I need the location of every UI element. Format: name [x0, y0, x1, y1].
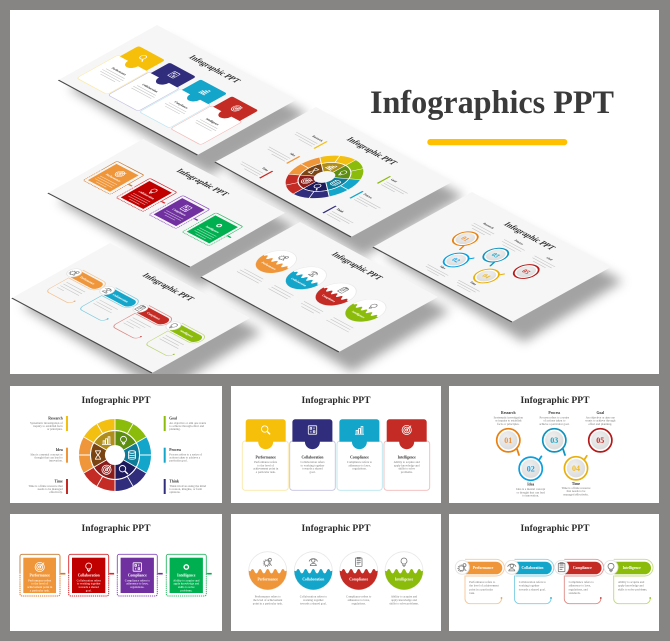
isometric slide: rings: Idea	[439, 265, 447, 270]
pill labels and text: Compliance refers to	[569, 580, 594, 584]
isometric slide: puzzle cards: Infographic PPT	[186, 54, 243, 85]
isometric slide: wheel: Research	[311, 135, 324, 142]
pill labels and text: Performance	[473, 566, 494, 570]
left column text: innovation.	[49, 459, 63, 463]
ring text: Time is a finite resource	[561, 486, 591, 490]
ring markers	[497, 429, 612, 480]
ring text: wants to achieve through	[585, 419, 616, 423]
hero accent bar	[427, 139, 567, 145]
circle labels and text: Collaboration	[302, 578, 324, 582]
isometric slide: wave circles	[200, 222, 450, 372]
left column text: Idea	[56, 448, 63, 452]
isometric slide: wheel: Think	[335, 208, 345, 213]
right column text: planning.	[169, 427, 181, 431]
frame text: problems.	[180, 588, 193, 592]
isometric slide: rings: Process	[513, 239, 525, 246]
panel: wave circles slide	[231, 514, 441, 631]
heading: Infographic PPT	[82, 396, 151, 406]
circle labels and text: towards a shared goal.	[300, 602, 327, 606]
isometric slide: wave circles: Performance	[260, 261, 278, 271]
ring numbers: 02	[527, 464, 535, 473]
isometric slide: wheel: Process	[362, 193, 374, 199]
isometric slide: dashed frames: Collaboration	[137, 190, 156, 200]
card text: goal.	[310, 470, 316, 474]
ring text: Systematic investigation	[494, 416, 524, 420]
heading: Infographic PPT	[302, 396, 371, 406]
right column text: opinions.	[169, 490, 181, 494]
isometric slide: rings: 03	[489, 252, 501, 259]
frame text: Performance refers	[28, 578, 52, 582]
right column text: particular goal.	[169, 459, 188, 463]
isometric slide: rings: Time	[469, 281, 478, 286]
isometric slide: wheel: Idea	[289, 152, 297, 157]
circle labels and text: Collaboration refers to	[300, 594, 327, 598]
segmented wheel diagram with bars	[66, 416, 166, 494]
card text	[253, 456, 420, 474]
four tabbed cards	[242, 419, 430, 490]
frame text: Performance	[29, 574, 50, 578]
left column text: Idea is a mental concept or	[30, 453, 63, 457]
isometric slide: rings: 01	[458, 236, 471, 243]
right column text: Think involves using the mind	[169, 484, 206, 488]
ring text: of actions taken to	[543, 419, 566, 423]
isometric slide: dashed frames: Intelligence	[204, 225, 221, 234]
frame text: to working together	[77, 582, 101, 586]
isometric slide: rings: 02	[449, 257, 462, 264]
left column text	[28, 416, 64, 494]
circle labels and text: working together	[303, 598, 324, 602]
ring text: facts or principles.	[497, 422, 520, 426]
isometric slide: dashed frames: Compliance	[171, 208, 188, 217]
pill labels and text: Ability to acquire and	[618, 580, 645, 584]
ring text: Idea	[527, 482, 534, 486]
isometric slide: wave circles: Intelligence	[350, 310, 367, 319]
ring text: Goal	[597, 411, 604, 415]
pill labels and text: Performance refers to	[469, 580, 496, 584]
left column text: or principles.	[47, 427, 63, 431]
frame text: Compliance	[128, 574, 147, 578]
circle labels and text	[253, 578, 419, 606]
ring text: managed effectively.	[564, 492, 589, 496]
isometric slide: rings: 05	[519, 269, 532, 276]
ring text: Process refers to a series	[540, 416, 570, 420]
card text: apply knowledge and	[394, 463, 420, 467]
circle labels and text: skills to solve problems.	[389, 602, 419, 606]
pill labels and text: regulations, and	[569, 587, 588, 592]
frame text: regulations.	[130, 585, 145, 589]
ring numbers: 04	[572, 464, 580, 473]
isometric slide: puzzle cards: Intelligence	[204, 117, 221, 126]
right column text: Goal	[169, 416, 177, 420]
frame text: a particular task.	[30, 588, 50, 592]
ring text: or thought that can lead	[517, 490, 545, 494]
card text: to the level of	[257, 463, 274, 467]
frame text: Compliance refers to	[125, 578, 150, 582]
left column text: inquiry to establish facts	[33, 424, 64, 428]
isometric slide: wheel	[214, 107, 464, 257]
card text: skills to solve	[398, 467, 416, 471]
ring text: achieve a particular goal.	[539, 422, 570, 426]
pill labels and text: working together	[519, 584, 539, 588]
pill labels and text: apply knowledge and	[618, 584, 644, 588]
isometric slide: rings: Research	[482, 222, 495, 230]
ring numbers: 01	[504, 436, 512, 445]
right column text: to reason, imagine, or form	[169, 487, 203, 492]
pill labels and text: task.	[469, 591, 475, 595]
pill labels and text: Collaboration refers to	[519, 580, 546, 584]
frame text: to the level of	[31, 582, 48, 586]
pill labels and text: Compliance	[573, 566, 592, 570]
isometric slide: pills: Infographic PPT	[140, 272, 197, 303]
frame text: Intelligence	[177, 574, 196, 578]
isometric slide: pills: Performance	[79, 276, 97, 286]
isometric slide: dashed frames: Infographic PPT	[174, 167, 232, 198]
frame text: adherence to laws,	[126, 582, 149, 587]
card text: Intelligence	[398, 456, 416, 460]
panel: dashed frames slide	[10, 514, 222, 631]
frame text: skills to solve	[178, 585, 195, 589]
card text: adherence to laws,	[348, 463, 371, 468]
panel: hero with isometric slides	[10, 10, 659, 393]
circle labels and text: Intelligence	[395, 578, 413, 582]
four colored frames	[20, 554, 212, 596]
left column text: needs to be managed	[38, 487, 63, 491]
right column text	[169, 416, 207, 494]
frame text: Collaboration refers	[77, 578, 102, 582]
isometric slide: rings: Goal	[545, 256, 554, 261]
isometric slide: pills: Intelligence	[179, 329, 195, 338]
circle labels and text: Compliance refers to	[346, 594, 372, 598]
ring text: Idea is a mental concept	[516, 487, 545, 491]
card text: achievement point in	[253, 467, 279, 471]
ring text: that needs to be	[567, 489, 586, 493]
circle labels and text: Performance	[257, 578, 278, 582]
circle labels and text: regulations.	[352, 602, 366, 606]
heading: Infographic PPT	[520, 524, 590, 534]
frame text: Collaboration	[78, 574, 100, 578]
pill labels and text: standards.	[569, 591, 581, 595]
ring text: Time	[572, 482, 580, 486]
left column text: Time is a finite resource that	[28, 484, 63, 488]
panel: puzzle cards slide	[231, 386, 441, 503]
pill labels and text: Intelligence	[623, 566, 641, 570]
left column text: Systematic investigation of	[30, 421, 63, 425]
circle labels and text: Compliance	[349, 578, 368, 582]
isometric slide: pills: Compliance	[145, 312, 162, 321]
ring text: or inquiry to establish	[495, 419, 522, 423]
isometric slide: puzzle cards: Collaboration	[141, 83, 159, 93]
circle labels and text: Performance refers to	[255, 594, 281, 598]
card text: Collaboration	[302, 456, 323, 460]
card text: Compliance	[350, 456, 369, 460]
card text: Performance	[255, 456, 276, 460]
pill labels and text: adherence to laws,	[569, 584, 591, 589]
pill labels and text: skills to solve problems.	[618, 587, 647, 591]
isometric slide: puzzle cards: Performance	[110, 67, 128, 76]
isometric slide: puzzle cards: Compliance	[173, 100, 190, 110]
ring text: effort and planning.	[588, 422, 612, 426]
isometric slide: rings	[372, 192, 623, 342]
four wave circles	[249, 552, 423, 590]
isometric slide stack	[11, 25, 623, 393]
ring text: Research	[501, 411, 516, 415]
heading: Infographic PPT	[82, 524, 151, 534]
panel: wheel slide	[10, 386, 222, 503]
pill labels and text: point in a particular	[469, 587, 493, 591]
frame text: achievement point in	[27, 585, 53, 589]
left column text: Time	[55, 480, 63, 484]
circle labels and text: adherence to laws,	[348, 598, 370, 603]
ring text: An objective or aim one	[586, 416, 615, 420]
isometric slide: wave circles: Compliance	[320, 294, 337, 303]
card text: a particular task.	[256, 470, 276, 474]
right column text: to achieve through effort and	[169, 424, 205, 428]
ring numbers: 03	[550, 436, 558, 445]
card text: Collaboration refers	[300, 460, 325, 464]
isometric slide: wave circles: Collaboration	[290, 277, 308, 287]
ring text: to innovation.	[522, 494, 539, 498]
pill labels and text	[469, 566, 647, 595]
isometric slide: dashed frames	[47, 139, 297, 287]
isometric slide: pills	[11, 245, 264, 374]
isometric slide: rings: Infographic PPT	[501, 221, 558, 252]
hero title: Infographics PPT	[370, 85, 614, 121]
isometric slide: wheel: Infographic PPT	[344, 136, 400, 167]
card text: to working together	[301, 463, 324, 467]
card text: regulations.	[352, 467, 367, 471]
card text: problems.	[401, 470, 413, 474]
left column text: Research	[48, 416, 63, 420]
left column text: effectively.	[49, 490, 63, 494]
frame text	[27, 574, 200, 592]
ring numbers	[504, 436, 604, 473]
heading: Infographic PPT	[302, 524, 371, 534]
pill labels and text: the level of achievement	[469, 584, 499, 588]
ring numbers: 05	[596, 436, 604, 445]
card text: Ability to acquire and	[394, 460, 420, 464]
frame text: towards a shared	[79, 585, 99, 589]
circle labels and text: the level of achievement	[253, 598, 283, 602]
left column text: thought that can lead to	[35, 456, 63, 460]
isometric slide: dashed frames: Performance	[104, 173, 123, 183]
frame text: apply knowledge and	[173, 582, 200, 586]
frame text: goal.	[86, 588, 92, 592]
right column text: actions taken to achieve a	[169, 456, 201, 460]
pill labels and text: Collaboration	[522, 566, 543, 570]
ring text: Process	[548, 411, 561, 415]
four pill headers with cards	[455, 559, 653, 604]
frame text: Ability to acquire and	[173, 578, 200, 582]
card text: Performance refers	[254, 460, 278, 464]
card text: Compliance refers to	[347, 460, 373, 464]
circle labels and text: Ability to acquire and	[391, 594, 418, 598]
isometric slide: wave circles: Infographic PPT	[329, 251, 386, 282]
heading: Infographic PPT	[520, 396, 590, 406]
card text: towards a shared	[302, 467, 323, 471]
isometric slide: wheel: Goal	[389, 178, 398, 183]
panel: numbered rings slide	[449, 386, 659, 503]
circle labels and text: point in a particular task.	[253, 602, 283, 606]
isometric slide: wheel: Time	[261, 167, 270, 172]
right column text: Process	[169, 448, 182, 452]
ring text	[494, 411, 616, 498]
isometric slide: pills: Collaboration	[111, 293, 130, 303]
circle labels and text: apply knowledge and	[391, 598, 417, 602]
panel: pill cards slide	[449, 514, 659, 631]
isometric slide: rings: 04	[480, 273, 492, 280]
right column text: An objective or aim one wants	[169, 421, 207, 425]
pill labels and text: towards a shared goal.	[519, 587, 546, 591]
right column text: Think	[169, 480, 180, 484]
isometric slide: puzzle cards	[58, 25, 308, 175]
right column text: Process refers to a series of	[169, 453, 202, 457]
